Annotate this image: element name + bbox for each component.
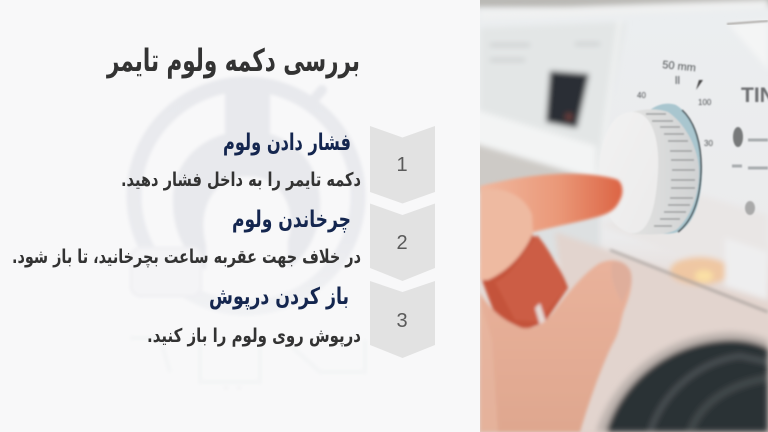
step 1 heading: فشار دادن ولوم bbox=[223, 130, 351, 156]
hand bbox=[480, 174, 632, 432]
knob face bbox=[631, 112, 658, 232]
step 1 chevron bbox=[370, 126, 435, 204]
step 2 chevron bbox=[370, 204, 435, 281]
step 3 description: درپوش روی ولوم را باز کنید. bbox=[147, 325, 361, 347]
dial scale labels: 40 bbox=[637, 91, 646, 100]
knob ridged side bbox=[632, 109, 699, 235]
dark door seal bbox=[596, 332, 768, 432]
dial scale labels: 100 bbox=[698, 98, 712, 107]
dial scale labels: ll bbox=[675, 75, 680, 87]
dial scale labels bbox=[637, 59, 768, 215]
step 2 description: در خلاف جهت عقربه ساعت بچرخانید، تا باز شود. bbox=[12, 246, 361, 268]
panel: left background bbox=[0, 0, 480, 432]
back of hand bbox=[480, 189, 533, 280]
step 3 number: 3 bbox=[396, 310, 408, 332]
dial scale labels: 50 mm bbox=[662, 59, 696, 74]
dial scale labels: 30 bbox=[704, 139, 713, 148]
watermark logo bbox=[130, 84, 365, 390]
step 3 chevron bbox=[370, 281, 435, 358]
step 3 heading: باز کردن درپوش bbox=[209, 284, 349, 310]
thumb and palm bbox=[480, 260, 632, 432]
step 2 heading: چرخاندن ولوم bbox=[232, 207, 351, 233]
machine lower panel bbox=[556, 234, 768, 300]
machine control panel bbox=[470, 0, 768, 260]
step 1 number: 1 bbox=[396, 154, 408, 176]
step 2 number: 2 bbox=[396, 232, 408, 254]
photo: hand turning washing machine knob bbox=[470, 0, 768, 432]
knob bbox=[636, 103, 703, 234]
step 1 description: دکمه تایمر را به داخل فشار دهید. bbox=[121, 169, 361, 191]
thumb nail bbox=[612, 263, 630, 290]
dial ring bbox=[650, 104, 702, 234]
title: بررسی دکمه ولوم تایمر bbox=[106, 43, 360, 79]
curled fingers bbox=[480, 232, 568, 330]
index finger bbox=[480, 172, 625, 234]
